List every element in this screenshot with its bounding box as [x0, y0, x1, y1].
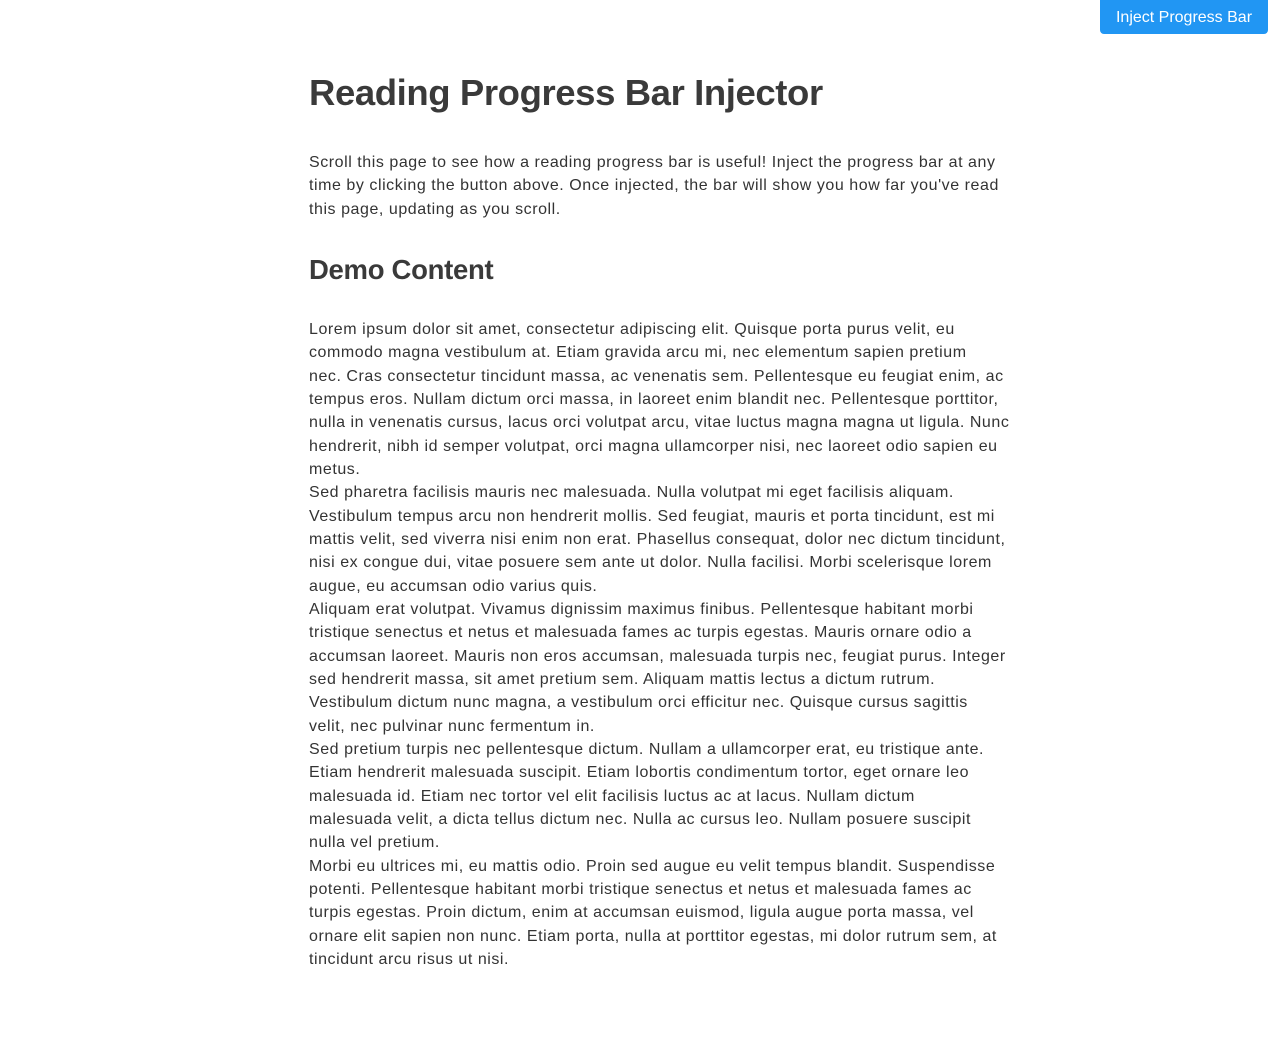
demo content text: augue, eu accumsan odio varius quis.: [309, 578, 597, 595]
demo content text: accumsan laoreet. Mauris non eros accumsan, malesuada turpis nec, feugiat purus. Integer: [309, 648, 1006, 665]
demo content text: commodo magna vestibulum at. Etiam gravida arcu mi, nec elementum sapien pretium: [309, 344, 967, 361]
demo content text: Sed pharetra facilisis mauris nec malesuada. Nulla volutpat mi eget facilisis aliquam.: [309, 484, 954, 501]
demo content text: tristique senectus et netus et malesuada fames ac turpis egestas. Mauris ornare odio a: [309, 624, 972, 641]
demo content text: velit, nec pulvinar nunc fermentum in.: [309, 718, 595, 735]
demo content text: ornare elit sapien non nunc. Etiam porta, nulla at porttitor egestas, mi dolor rutrum sem, at: [309, 928, 997, 945]
demo content text: potenti. Pellentesque habitant morbi tristique senectus et netus et malesuada fames ac: [309, 881, 972, 898]
demo content text: malesuada velit, a dicta tellus dictum nec. Nulla ac cursus leo. Nullam posuere suscipit: [309, 811, 971, 828]
demo content text: Vestibulum dictum nunc magna, a vestibulum orci efficitur nec. Quisque cursus sagittis: [309, 694, 968, 711]
demo content text: Lorem ipsum dolor sit amet, consectetur adipiscing elit. Quisque porta purus velit, eu: [309, 321, 955, 338]
demo content text: tempus eros. Nullam dictum orci massa, in laoreet enim blandit nec. Pellentesque porttitor,: [309, 391, 998, 408]
demo content text: metus.: [309, 461, 360, 478]
demo content text: Sed pretium turpis nec pellentesque dictum. Nullam a ullamcorper erat, eu tristique ante.: [309, 741, 984, 758]
demo content text: nulla in venenatis cursus, lacus orci volutpat arcu, vitae luctus magna magna ut ligula. Nunc: [309, 414, 1009, 431]
demo content text: Etiam hendrerit malesuada suscipit. Etiam lobortis condimentum tortor, eget ornare leo: [309, 764, 969, 781]
demo content text: malesuada id. Etiam nec tortor vel elit facilisis luctus ac at lacus. Nullam dictum: [309, 788, 915, 805]
demo content text: mattis velit, sed viverra nisi enim non erat. Phasellus consequat, dolor nec dictum tincidunt,: [309, 531, 1005, 548]
demo content text: Vestibulum tempus arcu non hendrerit mollis. Sed feugiat, mauris et porta tincidunt, est mi: [309, 508, 995, 525]
demo content text: turpis egestas. Proin dictum, enim at accumsan euismod, ligula augue porta massa, vel: [309, 904, 974, 921]
demo content text: tincidunt arcu risus ut nisi.: [309, 951, 509, 968]
demo content text: hendrerit, nibh id semper volutpat, orci magna ullamcorper nisi, nec laoreet odio sapien eu: [309, 438, 998, 455]
button: inject progress bar: Inject Progress Bar: [1116, 9, 1252, 26]
demo content text: nisi ex congue dui, vitae posuere sem ante ut dolor. Nulla facilisi. Morbi scelerisque lorem: [309, 554, 992, 571]
intro text: this page, updating as you scroll.: [309, 201, 561, 218]
main content column: [309, 72, 1009, 968]
demo content text: sed hendrerit massa, sit amet pretium sem. Aliquam mattis lectus a dictum rutrum.: [309, 671, 935, 688]
demo content text: [309, 321, 1009, 968]
intro text: time by clicking the button above. Once injected, the bar will show you how far you've read: [309, 177, 999, 194]
demo content text: Aliquam erat volutpat. Vivamus dignissim maximus finibus. Pellentesque habitant morbi: [309, 601, 974, 618]
intro text: [309, 154, 999, 218]
demo content text: Morbi eu ultrices mi, eu mattis odio. Proin sed augue eu velit tempus blandit. Suspendisse: [309, 858, 995, 875]
button: inject progress bar: [1100, 0, 1268, 34]
heading: demo content: Demo Content: [309, 254, 493, 285]
intro text: Scroll this page to see how a reading progress bar is useful! Inject the progress bar at any: [309, 154, 996, 171]
demo content text: nec. Cras consectetur tincidunt massa, ac venenatis sem. Pellentesque eu feugiat enim, ac: [309, 368, 1004, 385]
demo content text: nulla vel pretium.: [309, 834, 440, 851]
title: Reading Progress Bar Injector: [309, 72, 823, 113]
